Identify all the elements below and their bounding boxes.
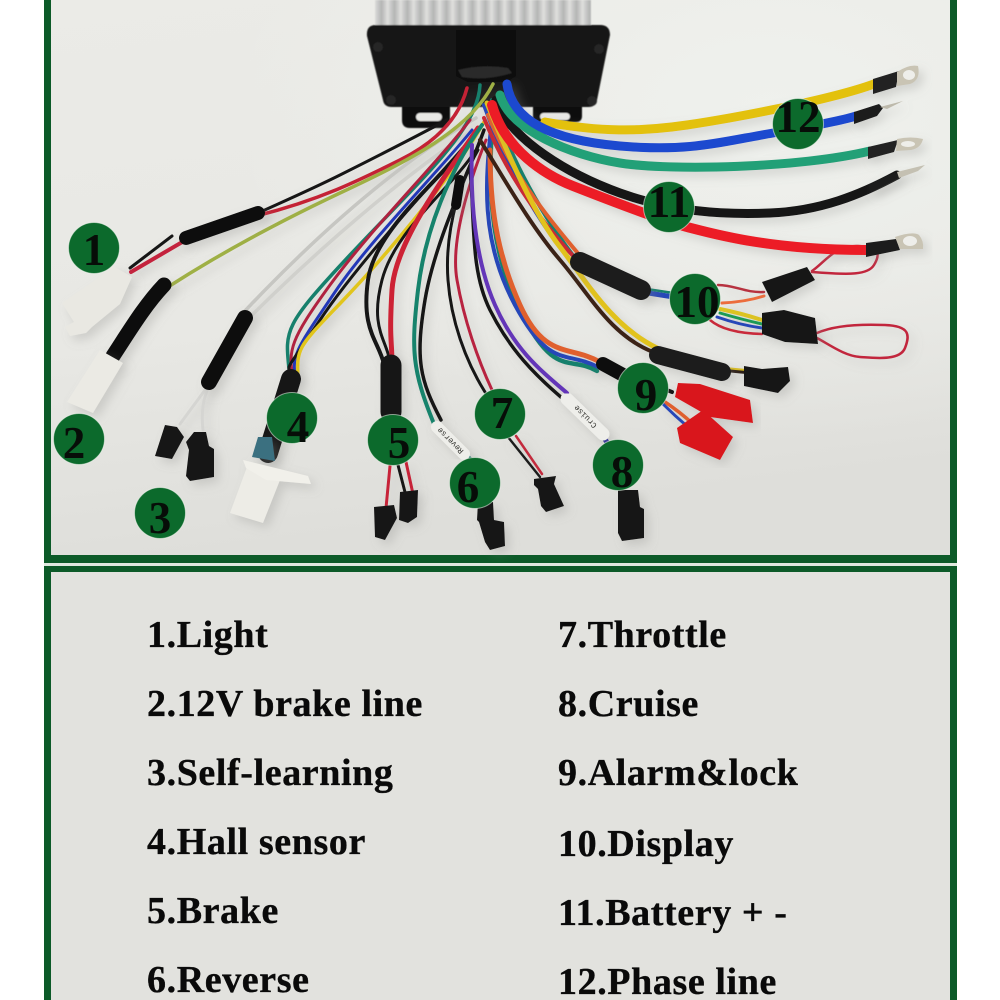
white label sleeves	[437, 399, 603, 454]
badge 8: 8	[611, 447, 633, 497]
controller unit	[367, 0, 610, 128]
badge 6	[450, 458, 500, 512]
badge 7	[474, 388, 526, 440]
badge 3: 3	[149, 493, 171, 543]
wires: group 6 reverse	[414, 125, 484, 462]
badge 5	[368, 414, 418, 468]
wires: group 1 light	[130, 88, 467, 272]
badge 10: 10	[674, 277, 720, 327]
badge 1: 1	[83, 225, 105, 275]
panel: legend	[44, 566, 957, 1000]
thick phase and battery wires	[492, 84, 897, 250]
wires: group 2 brake	[168, 84, 493, 287]
badge 5: 5	[388, 418, 410, 468]
badge 7: 7	[491, 388, 513, 438]
black connectors	[155, 267, 818, 550]
badge 4	[266, 392, 318, 452]
legend right column: 11.Battery + -	[558, 892, 788, 934]
heat-shrink sleeves	[113, 180, 722, 453]
legend right column: 7.Throttle	[558, 614, 727, 656]
legend right column: 10.Display	[558, 823, 734, 865]
legend left column: 5.Brake	[147, 890, 279, 932]
legend left column	[147, 614, 423, 1000]
wires: group yellow and brown	[480, 103, 746, 372]
wires: group 5 brake	[366, 128, 478, 508]
legend left column: 3.Self-learning	[147, 752, 393, 794]
badge 3	[134, 488, 186, 543]
wires: group 7 throttle	[447, 140, 542, 477]
divider band	[44, 563, 957, 566]
badge 9	[618, 362, 668, 420]
badge 12: 12	[776, 92, 820, 142]
wires: group 3 self-learning	[180, 118, 476, 430]
legend left column: 4.Hall sensor	[147, 821, 366, 863]
badge 9: 9	[635, 370, 657, 420]
badge 1	[68, 222, 120, 275]
number badges	[54, 92, 824, 543]
badge 6: 6	[457, 462, 479, 512]
phase wire terminals	[854, 66, 925, 257]
panel: wiring photo	[44, 0, 957, 563]
badge 2: 2	[63, 418, 85, 468]
wires: group 10 display	[484, 100, 908, 358]
thin wire harness	[130, 84, 908, 508]
legend left column: 6.Reverse	[147, 959, 310, 1000]
red alarm connector	[675, 383, 753, 460]
badge 2	[54, 414, 104, 468]
legend right column: 8.Cruise	[558, 683, 699, 725]
badge 4: 4	[287, 402, 309, 452]
wires: group 4 hall	[287, 85, 484, 378]
wires: group 9 alarm	[487, 120, 693, 427]
badge 11: 11	[648, 177, 690, 227]
white connectors	[62, 266, 311, 523]
sleeve label: Reverse: Reverse	[436, 425, 466, 455]
badge 8	[592, 440, 644, 497]
legend right column: 9.Alarm&lock	[558, 752, 799, 794]
legend left column: 1.Light	[147, 614, 268, 656]
sleeve label: Cruise: Cruise	[573, 402, 599, 429]
wires: group 8 cruise	[470, 145, 608, 444]
legend left column: 2.12V brake line	[147, 683, 423, 725]
legend right column	[558, 614, 799, 1000]
